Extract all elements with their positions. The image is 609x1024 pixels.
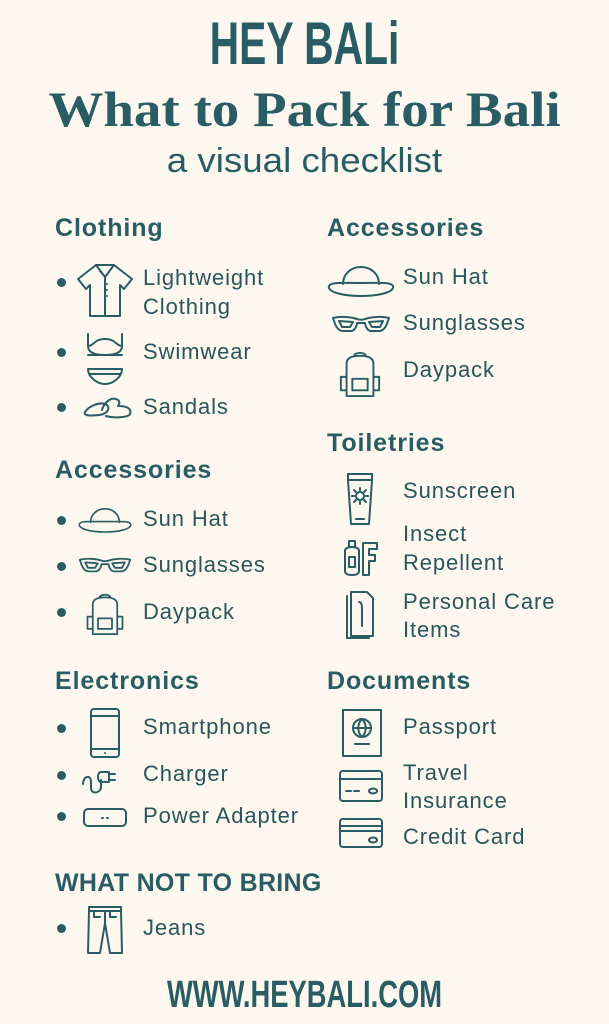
heading: electronics: Electronics <box>55 667 200 695</box>
text: sun hat right: Sun Hat <box>403 264 489 289</box>
icon: passport <box>342 709 382 757</box>
icon: sunglasses right <box>332 316 390 332</box>
icon: sun hat right <box>328 266 394 297</box>
icon: sandals <box>84 398 132 418</box>
icon: sun hat <box>78 508 132 533</box>
text: personal care items: Personal Care <box>403 589 555 614</box>
heading: documents: Documents <box>327 667 471 695</box>
icon: daypack right <box>340 352 380 397</box>
icon: sunscreen <box>347 473 373 525</box>
text: smartphone: Smartphone <box>143 714 272 739</box>
heading: clothing: Clothing <box>55 214 164 242</box>
text: sun hat: Sun Hat <box>143 506 229 531</box>
heading: accessories: Accessories <box>55 456 212 484</box>
icon: travel insurance <box>339 770 383 802</box>
icon: shirt <box>77 264 133 317</box>
text: insect repellent <box>403 521 504 575</box>
text: travel insurance <box>403 760 508 813</box>
heading: toiletries: Toiletries <box>327 429 445 457</box>
text: sunscreen: Sunscreen <box>403 478 516 503</box>
text: daypack right: Daypack <box>403 357 495 382</box>
text: lightweight clothing: Lightweight <box>143 265 264 290</box>
text: sunglasses: Sunglasses <box>143 552 266 577</box>
icon: smartphone <box>90 708 120 758</box>
text: charger: Charger <box>143 761 229 786</box>
text: travel insurance: Insurance <box>403 788 508 813</box>
icon: sunglasses <box>78 558 132 572</box>
text: insect repellent: Repellent <box>403 550 504 575</box>
text: lightweight clothing <box>143 265 264 319</box>
text: power adapter: Power Adapter <box>143 803 299 828</box>
icon: jeans <box>87 906 123 954</box>
subtitle: What to Pack for Bali: What to Pack for Bali <box>48 81 561 137</box>
title: HEY BALi: HEY BALi <box>210 10 399 77</box>
icon: swimwear <box>87 333 123 385</box>
icon: daypack <box>86 594 124 635</box>
icon: credit card <box>339 818 383 848</box>
text: credit card: Credit Card <box>403 824 525 849</box>
icon: power adapter <box>83 808 127 827</box>
icon: insect repellent <box>344 540 378 576</box>
text: lightweight clothing: Clothing <box>143 294 231 319</box>
text: travel insurance: Travel <box>403 760 469 785</box>
icon: personal care <box>346 591 374 639</box>
heading: accessories right: Accessories <box>327 214 484 242</box>
text: daypack: Daypack <box>143 599 235 624</box>
footer: website: WWW.HEYBALI.COM <box>167 974 442 1016</box>
text: passport: Passport <box>403 714 497 739</box>
heading: what not to bring: WHAT NOT TO BRING <box>55 869 322 897</box>
icon: charger <box>82 771 116 794</box>
text: personal care items <box>403 589 555 642</box>
text: sunglasses right: Sunglasses <box>403 310 526 335</box>
text: swimwear: Swimwear <box>143 339 252 364</box>
tagline: a visual checklist <box>167 142 442 180</box>
text: personal care items: Items <box>403 617 461 642</box>
text: sandals: Sandals <box>143 394 229 419</box>
text: jeans: Jeans <box>143 915 206 940</box>
text: insect repellent: Insect <box>403 521 467 546</box>
